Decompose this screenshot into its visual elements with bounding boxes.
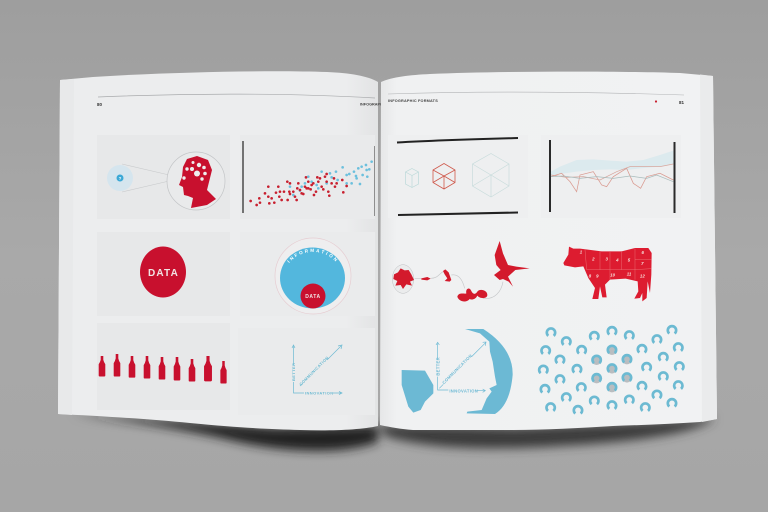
panel: information and data circles: DATA xyxy=(305,294,321,300)
icon: eagle xyxy=(494,241,530,287)
chart labels: COMMUNICATION xyxy=(441,353,473,385)
panel: information and data circles xyxy=(274,238,352,314)
cow cut numbers: 10 xyxy=(610,272,616,277)
panel: cubes xyxy=(388,135,528,218)
cow cut numbers: 5 xyxy=(628,258,631,263)
panel: DATA circle: DATA xyxy=(148,268,179,279)
chart labels xyxy=(436,353,478,393)
large cube xyxy=(472,154,509,197)
panel: line chart xyxy=(541,135,681,218)
book shadow xyxy=(70,414,715,451)
gray filled circles xyxy=(592,345,632,392)
medium cube xyxy=(433,164,455,189)
panel: communication chart: BETTER xyxy=(291,363,296,381)
chart labels: BETTER xyxy=(436,357,441,376)
cow cut numbers: 11 xyxy=(627,272,632,277)
cow cut numbers: 2 xyxy=(591,257,595,262)
panel: communication chart: COMMUNICATION xyxy=(298,355,330,387)
panel: ring pattern xyxy=(539,326,683,413)
panel: communication chart: INNOVATION xyxy=(305,390,334,396)
cow cut numbers: 8 xyxy=(589,273,592,278)
icon: rose in circle xyxy=(392,265,414,293)
panel: bottles xyxy=(97,323,230,410)
icon: red head with white dots xyxy=(179,156,216,208)
panel: information and data circles: INFORMATION xyxy=(287,248,338,263)
panel: food chain xyxy=(392,241,530,301)
icon: fish xyxy=(421,277,431,280)
small cube xyxy=(406,168,418,188)
page header left: 80 xyxy=(97,102,103,107)
left blue shape xyxy=(402,370,433,413)
cow cut numbers: 1 xyxy=(580,250,583,255)
chart lines xyxy=(551,151,673,192)
cow cut numbers: 6 xyxy=(641,250,644,255)
scatter points xyxy=(251,162,372,205)
icon: snake xyxy=(457,289,487,301)
cow cut numbers: 12 xyxy=(640,273,645,278)
cow cut numbers: 3 xyxy=(605,257,608,262)
cow cut numbers: 7 xyxy=(641,261,644,266)
page header right xyxy=(388,92,685,105)
chart labels: INNOVATION xyxy=(449,388,478,393)
left page xyxy=(58,71,387,430)
page header left: INFOGRAPHIC xyxy=(360,102,387,106)
page header left xyxy=(97,94,387,107)
cow cut numbers: 9 xyxy=(596,273,599,278)
page header right: 81 xyxy=(679,100,685,105)
panel: scatter plot xyxy=(240,135,375,219)
panel: face with communication chart xyxy=(402,329,513,414)
panel: cow xyxy=(563,247,652,301)
face silhouette xyxy=(465,329,513,414)
panel: head diagram xyxy=(97,135,230,219)
icon: mouse xyxy=(443,269,451,282)
chart axes xyxy=(436,342,486,392)
page header right: INFOGRAPHIC FORMATS xyxy=(388,99,438,103)
bottles row xyxy=(99,354,227,384)
icon: blue radial circle: ? xyxy=(119,176,122,181)
panel: DATA circle xyxy=(97,232,230,316)
blue rings xyxy=(539,326,683,413)
panel: communication chart xyxy=(238,328,375,415)
right page xyxy=(380,72,717,430)
cow cut numbers xyxy=(580,250,645,278)
cow cut numbers: 4 xyxy=(615,258,619,263)
